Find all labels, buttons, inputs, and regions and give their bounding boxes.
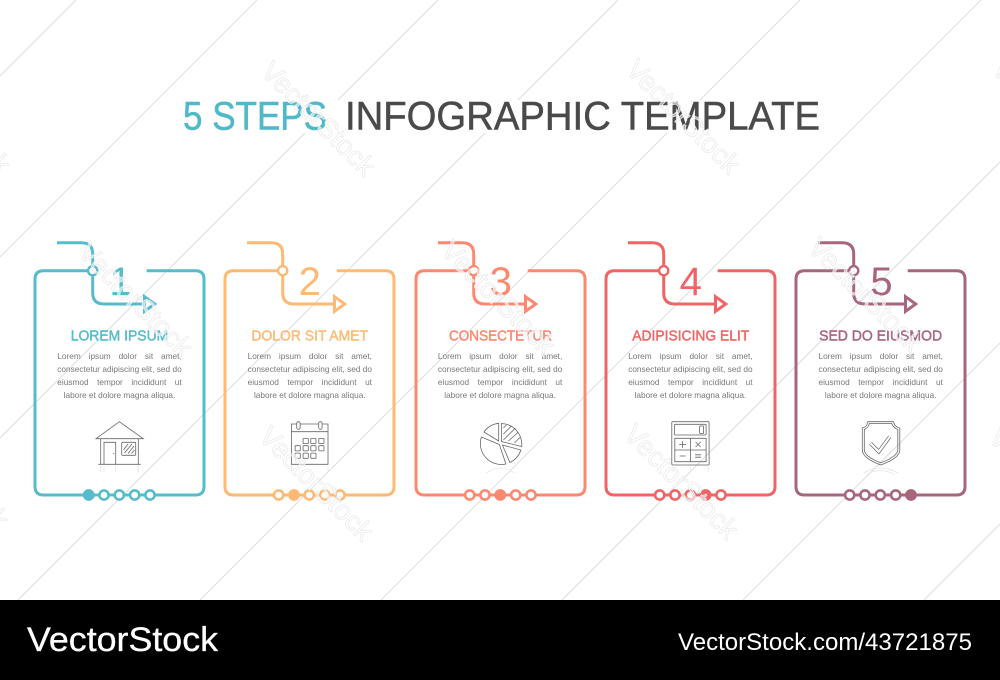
arrow [818, 243, 916, 311]
heading: LOREM IPSUM [71, 329, 168, 345]
number: 2 [299, 260, 321, 304]
card frame [796, 271, 965, 495]
title: INFOGRAPHIC TEMPLATE [345, 94, 820, 138]
body text [248, 352, 372, 400]
body text [57, 352, 182, 400]
card frame [35, 271, 204, 495]
icon: house [96, 422, 143, 472]
icon: pie chart [480, 423, 521, 473]
footer bar [0, 600, 1000, 680]
watermarks: VectorStock [435, 234, 562, 362]
body text: consectetur adipiscing elit, sed do [438, 365, 562, 374]
icon: shield [862, 422, 900, 474]
panel: step 4 [604, 241, 776, 501]
progress dots [655, 489, 725, 501]
body text: Lorem ipsum dolor sit amet, [438, 352, 562, 361]
body text: eiusmod tempor incididunt ut [818, 378, 943, 387]
watermarks: VectorStock [620, 53, 747, 181]
body text: eiusmod tempor incididunt ut [248, 378, 372, 387]
icon: calculator [672, 422, 709, 472]
body text: Lorem ipsum dolor sit amet, [57, 352, 182, 361]
number: 1 [109, 260, 132, 304]
footer bar: VectorStock [27, 621, 219, 659]
heading: ADIPISICING ELIT [632, 329, 749, 345]
watermarks: VectorStock [618, 418, 745, 546]
watermarks: VectorStock [802, 231, 929, 359]
icon: calendar [292, 422, 328, 471]
card frame [606, 271, 775, 495]
heading: CONSECTETUR [449, 329, 552, 345]
heading: DOLOR SIT AMET [252, 329, 368, 345]
body text: Lorem ipsum dolor sit amet, [818, 352, 943, 361]
number: 5 [871, 260, 893, 304]
body text: labore et dolore magna aliqua. [825, 391, 937, 400]
panel: step 2 [224, 241, 396, 501]
panel: step 5 [794, 241, 966, 501]
arrow [628, 243, 726, 311]
heading: SED DO EIUSMOD [819, 329, 942, 345]
panel: step 3 [414, 241, 586, 501]
body text: labore et dolore magna aliqua. [635, 391, 746, 400]
progress dots [845, 489, 917, 501]
progress dots [274, 489, 345, 501]
title: 5 STEPS [183, 94, 327, 138]
body text: consectetur adipiscing elit, sed do [248, 365, 372, 374]
arrow [57, 243, 155, 311]
body text [818, 352, 943, 400]
watermarks: VectorStock [253, 420, 380, 548]
watermarks: VectorStock [72, 236, 199, 364]
body text: Lorem ipsum dolor sit amet, [248, 352, 372, 361]
footer bar: VectorStock.com/43721875 [678, 629, 972, 656]
body text: consectetur adipiscing elit, sed do [628, 365, 753, 374]
body text: Lorem ipsum dolor sit amet, [628, 352, 753, 361]
panel: step 1 [34, 241, 206, 501]
card frame [416, 271, 585, 495]
body text [438, 352, 562, 400]
body text: labore et dolore magna aliqua. [64, 391, 175, 400]
body text: labore et dolore magna aliqua. [444, 391, 556, 400]
body text: eiusmod tempor incididunt ut [57, 378, 182, 387]
arrow [438, 243, 535, 311]
progress dots [83, 489, 155, 501]
number: 3 [489, 260, 511, 304]
body text: consectetur adipiscing elit, sed do [818, 365, 943, 374]
body text: labore et dolore magna aliqua. [254, 391, 366, 400]
body text: consectetur adipiscing elit, sed do [57, 365, 182, 374]
body text: eiusmod tempor incididunt ut [438, 378, 562, 387]
progress dots [465, 489, 535, 501]
number: 4 [680, 260, 702, 304]
watermarks: VectorStock [255, 55, 382, 183]
card frame [225, 271, 394, 495]
body text: eiusmod tempor incididunt ut [628, 378, 753, 387]
arrow [247, 243, 345, 311]
body text [628, 352, 753, 400]
